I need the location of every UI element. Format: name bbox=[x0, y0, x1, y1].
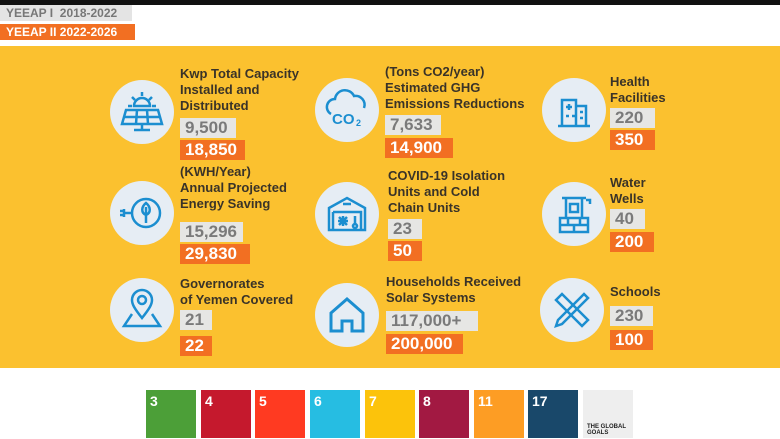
text: covid bbox=[388, 168, 505, 215]
yellow panel: 23 bbox=[393, 219, 412, 238]
text: Kwp capacity: Installed and bbox=[180, 82, 259, 97]
text: households bbox=[386, 274, 521, 305]
SDG tiles row: 6 bbox=[314, 393, 322, 409]
text: covid: COVID-19 Isolation bbox=[388, 168, 505, 183]
text: governorates bbox=[180, 276, 293, 307]
text: energy saving bbox=[180, 164, 287, 211]
icon: CO2 cloud: 2 bbox=[356, 118, 361, 128]
text: GHG: (Tons CO2/year) bbox=[385, 64, 484, 79]
yellow panel: 21 bbox=[185, 310, 204, 329]
yellow panel: 350 bbox=[615, 130, 643, 149]
text: health: Facilities bbox=[610, 90, 666, 105]
yellow panel: 220 bbox=[615, 108, 643, 127]
yellow panel: 100 bbox=[615, 330, 643, 349]
yellow panel: 9,500 bbox=[185, 118, 228, 137]
icon: schools bbox=[540, 278, 604, 342]
legend: YEEAP I: YEEAP I 2018-2022 bbox=[6, 6, 117, 20]
icon: CO2 cloud bbox=[315, 78, 379, 142]
text: governorates: of Yemen Covered bbox=[180, 292, 293, 307]
yellow panel: 200 bbox=[615, 232, 643, 251]
text: health bbox=[610, 74, 666, 105]
SDG tiles row: 4 bbox=[205, 393, 213, 409]
SDG tiles row: 11 bbox=[478, 393, 493, 409]
text: energy saving: (KWH/Year) bbox=[180, 164, 251, 179]
yellow panel: 22 bbox=[185, 336, 204, 355]
SDG tiles row: THE GLOBAL GOALS bbox=[587, 424, 626, 436]
text: health: Health bbox=[610, 74, 650, 89]
icon: cold chain bbox=[315, 182, 379, 246]
SDG tiles row: 17 bbox=[532, 393, 548, 409]
text: GHG: Estimated GHG bbox=[385, 80, 480, 95]
SDG tiles row bbox=[146, 390, 633, 438]
SDG tiles row: 5 bbox=[259, 393, 267, 409]
text: GHG: Emissions Reductions bbox=[385, 96, 524, 111]
text: governorates: Governorates bbox=[180, 276, 265, 291]
text: schools: Schools bbox=[610, 284, 661, 299]
yellow panel: 29,830 bbox=[185, 244, 237, 263]
text: covid: Units and Cold bbox=[388, 184, 480, 199]
top black bar bbox=[0, 0, 780, 5]
yellow panel: 200,000 bbox=[391, 334, 452, 353]
text: water wells: Water bbox=[610, 175, 646, 190]
text: Kwp capacity: Distributed bbox=[180, 98, 249, 113]
text: households: Solar Systems bbox=[386, 290, 476, 305]
text: GHG bbox=[385, 64, 524, 111]
icon: house bbox=[315, 283, 379, 347]
yellow panel: 15,296 bbox=[185, 222, 237, 241]
yellow panel: 50 bbox=[393, 241, 412, 260]
text: Kwp capacity: Kwp Total Capacity bbox=[180, 66, 299, 81]
text: households: Households Received bbox=[386, 274, 521, 289]
yellow panel: 230 bbox=[615, 306, 643, 325]
yellow panel: 40 bbox=[615, 209, 634, 228]
text: water wells: Wells bbox=[610, 191, 644, 206]
yellow panel: 7,633 bbox=[390, 115, 433, 134]
legend: YEEAP II: YEEAP II 2022-2026 bbox=[6, 25, 117, 39]
icon: map pin bbox=[110, 278, 174, 342]
yellow panel: 18,850 bbox=[185, 140, 237, 159]
SDG tiles row: 8 bbox=[423, 393, 431, 409]
text: covid: Chain Units bbox=[388, 200, 460, 215]
text: Kwp capacity bbox=[180, 66, 299, 113]
icon: water well bbox=[542, 182, 606, 246]
SDG tiles row: 7 bbox=[369, 393, 377, 409]
icon: CO2 cloud: CO bbox=[332, 111, 355, 128]
text: energy saving: Energy Saving bbox=[180, 196, 270, 211]
yellow panel bbox=[0, 46, 780, 368]
yellow panel: 14,900 bbox=[390, 138, 442, 157]
text: water wells bbox=[610, 175, 646, 206]
icon: hospital bbox=[542, 78, 606, 142]
icon: energy plug bbox=[110, 181, 174, 245]
icon: solar panel bbox=[110, 80, 174, 144]
SDG tiles row: 3 bbox=[150, 393, 158, 409]
text: energy saving: Annual Projected bbox=[180, 180, 287, 195]
yellow panel: 117,000+ bbox=[391, 311, 461, 330]
